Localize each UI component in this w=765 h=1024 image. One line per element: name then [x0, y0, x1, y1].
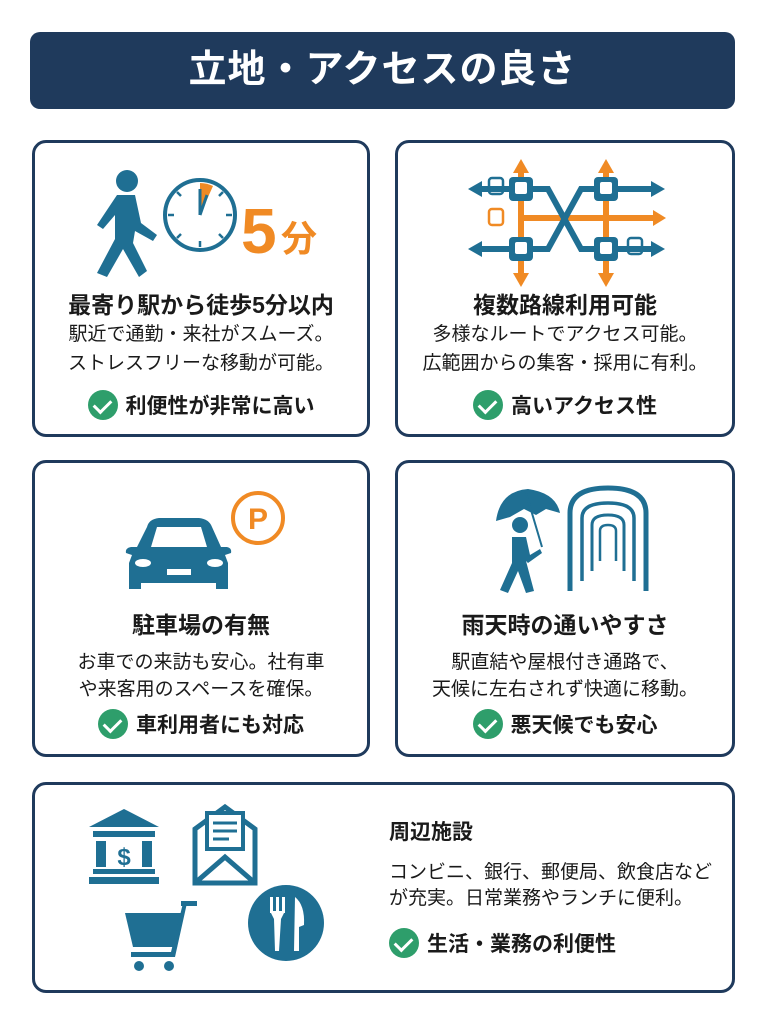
check: daily life: 生活・業務の利便性	[427, 933, 616, 956]
icon: facilities: $	[117, 844, 131, 871]
description: 駅近で通勤・来社がスムーズ。	[68, 324, 334, 345]
description: 駅直結や屋根付き通路で、	[451, 652, 679, 673]
icon: car with parking sign	[126, 491, 285, 589]
check: convenience: 利便性が非常に高い	[126, 395, 314, 418]
heading: 複数路線利用可能	[473, 292, 657, 318]
description	[389, 862, 712, 909]
icon: walker, clock, 5 minutes: 分	[281, 218, 317, 259]
check: car users: 車利用者にも対応	[136, 714, 304, 737]
description: 広範囲からの集客・採用に有利。	[422, 353, 708, 374]
description	[422, 324, 708, 374]
icon: walker, clock, 5 minutes	[97, 170, 317, 277]
heading: 雨天時の通いやすさ	[462, 612, 668, 638]
panel: multiple lines	[395, 140, 735, 437]
title	[30, 32, 735, 109]
description: 天候に左右されず快適に移動。	[432, 679, 698, 700]
check: car users	[98, 709, 304, 739]
description: が充実。日常業務やランチに便利。	[389, 888, 693, 909]
icon: route network	[468, 159, 666, 287]
check: access: 高いアクセス性	[511, 395, 657, 418]
description: 多様なルートでアクセス可能。	[432, 324, 698, 345]
icon: facilities	[89, 804, 324, 971]
heading: 駐車場の有無	[132, 612, 270, 638]
panel: nearby facilities	[32, 782, 735, 993]
icon: walker, clock, 5 minutes: 5	[241, 195, 277, 267]
description: ストレスフリーな移動が可能。	[68, 353, 334, 374]
heading: 周辺施設	[389, 821, 473, 844]
panel: rainy day	[395, 460, 735, 757]
title: 立地・アクセスの良さ	[188, 49, 577, 91]
icon: umbrella walker and covered walkway	[496, 486, 648, 593]
description	[68, 324, 334, 374]
heading: 最寄り駅から徒歩5分以内	[68, 292, 334, 318]
panel: station walk	[32, 140, 370, 437]
icon: car with parking sign: P	[248, 503, 268, 536]
description: コンビニ、銀行、郵便局、飲食店など	[389, 862, 712, 883]
description: お車での来訪も安心。社有車	[77, 652, 324, 673]
description	[432, 652, 698, 700]
description: や来客用のスペースを確保。	[79, 679, 323, 700]
check: convenience	[88, 390, 314, 420]
check: bad weather: 悪天候でも安心	[510, 714, 658, 737]
panel: parking	[32, 460, 370, 757]
check: access	[473, 390, 657, 420]
description	[77, 652, 324, 700]
check: bad weather	[473, 709, 658, 739]
check: daily life	[389, 928, 616, 958]
